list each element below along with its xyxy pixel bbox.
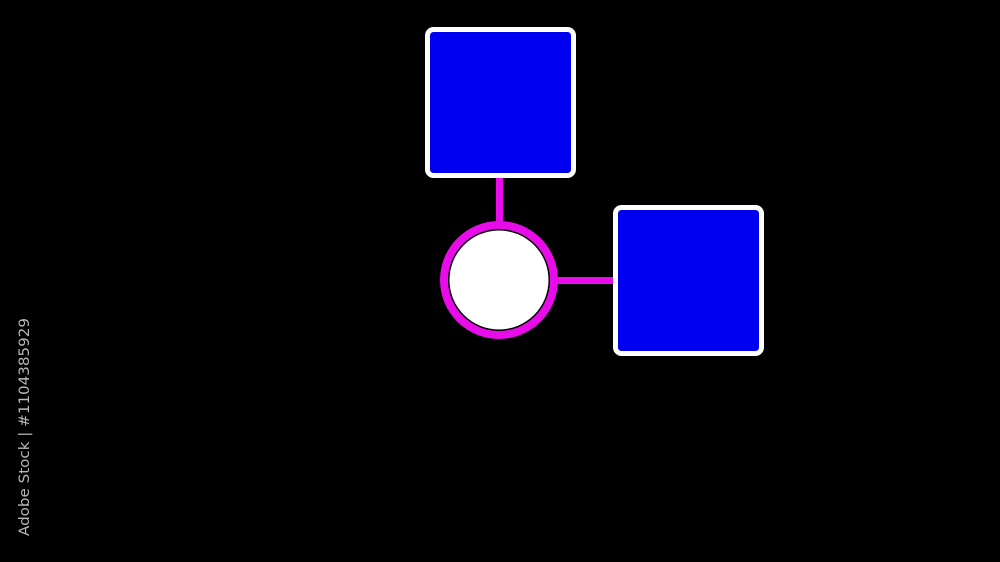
box: right square bbox=[616, 208, 762, 354]
connector: horizontal bbox=[552, 277, 616, 284]
node: central circle bbox=[440, 221, 558, 339]
text: stock id: Adobe Stock | #1104385929 bbox=[17, 318, 33, 536]
connector: vertical bbox=[496, 174, 503, 226]
box: top square bbox=[428, 30, 574, 176]
